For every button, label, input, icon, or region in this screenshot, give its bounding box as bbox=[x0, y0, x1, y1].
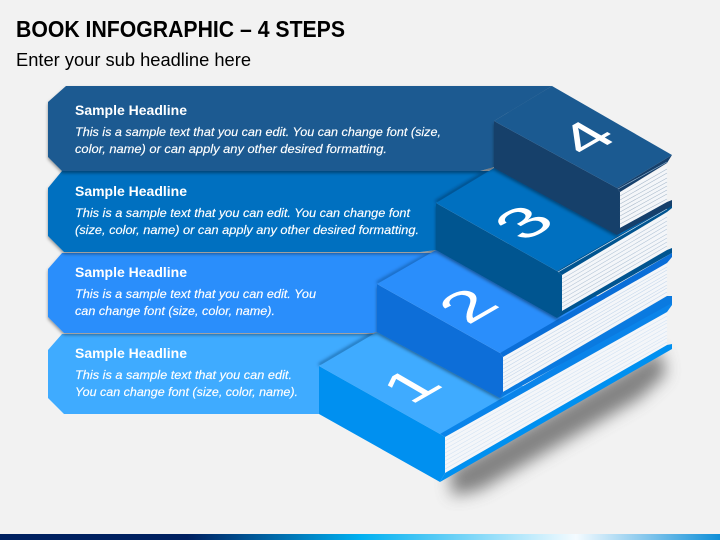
step 3 body text: This is a sample text that you can edit. You can change font bbox=[75, 206, 411, 220]
book 1 upper cover strip bbox=[440, 300, 672, 437]
book 3 bbox=[436, 168, 672, 318]
step 3 headline: Sample Headline bbox=[75, 183, 187, 199]
subtitle: Enter your sub headline here bbox=[16, 50, 251, 70]
step 2 headline: Sample Headline bbox=[75, 264, 187, 280]
step 4 body text: color, name) or can apply any other desired formatting. bbox=[75, 142, 387, 156]
book 1 top cover bbox=[319, 332, 560, 434]
number 1: 1 bbox=[365, 359, 456, 412]
panel: step 1 bbox=[48, 334, 380, 414]
book 4 side and shadow bbox=[494, 121, 620, 235]
step 1 body text bbox=[75, 368, 298, 399]
book 1 bbox=[319, 300, 672, 482]
step 4 body text: This is a sample text that you can edit. You can change font (size, bbox=[75, 125, 441, 139]
bottom gradient bar bbox=[0, 534, 720, 540]
step 4 headline: Sample Headline bbox=[75, 102, 187, 118]
title: BOOK INFOGRAPHIC – 4 STEPS bbox=[16, 16, 345, 42]
book 3 side and shadow bbox=[436, 203, 562, 318]
step 3 body text: (size, color, name) or can apply any other desired formatting. bbox=[75, 223, 419, 237]
book 3 top cover bbox=[436, 168, 660, 271]
book 2 bbox=[377, 250, 672, 398]
panel: step 4 bbox=[48, 86, 552, 171]
book 4 lower cover strip bbox=[617, 200, 672, 235]
book 1 pages bbox=[445, 312, 667, 473]
number 4: 4 bbox=[540, 111, 631, 164]
panel: step 2 bbox=[48, 253, 440, 333]
book 4 top cover bbox=[494, 86, 672, 188]
book 3 lower cover strip bbox=[557, 248, 672, 318]
book 1 lower cover strip bbox=[440, 344, 672, 482]
step 2 body text bbox=[75, 287, 316, 318]
book 2 lower cover strip bbox=[500, 296, 672, 398]
step 1 body text: You can change font (size, color, name). bbox=[75, 385, 298, 399]
book shadow on ground bbox=[450, 350, 666, 496]
book 2 top cover bbox=[377, 250, 610, 353]
step 1 body text: This is a sample text that you can edit. bbox=[75, 368, 292, 382]
step 4 body text bbox=[75, 125, 441, 156]
number 3: 3 bbox=[478, 196, 569, 249]
book 3 upper cover strip bbox=[557, 205, 672, 275]
step 2 body text: This is a sample text that you can edit. You bbox=[75, 287, 316, 301]
book 4 bbox=[494, 86, 672, 235]
step 1 headline: Sample Headline bbox=[75, 345, 187, 361]
step 2 body text: can change font (size, color, name). bbox=[75, 304, 275, 318]
book 4 pages bbox=[620, 165, 667, 228]
book 4 upper cover strip bbox=[617, 155, 672, 192]
book 1 side bbox=[319, 366, 445, 482]
book 3 pages bbox=[562, 213, 667, 311]
step 3 body text bbox=[75, 206, 419, 237]
book 2 upper cover strip bbox=[500, 253, 672, 357]
panel: step 3 bbox=[48, 171, 500, 252]
book 2 pages bbox=[503, 263, 667, 392]
book 2 side and shadow bbox=[377, 284, 503, 398]
number 2: 2 bbox=[422, 279, 513, 332]
